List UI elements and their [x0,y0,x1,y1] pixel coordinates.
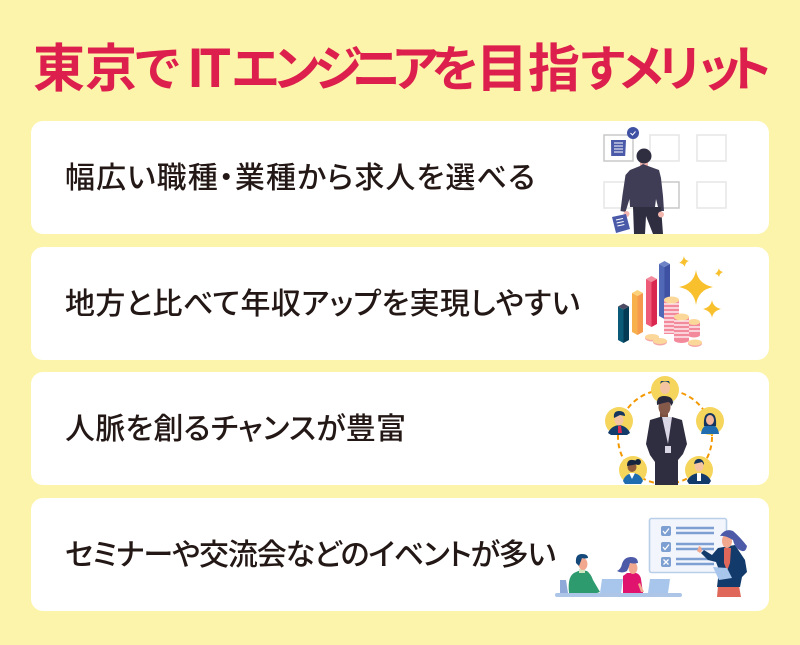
person: left [605,407,633,435]
presenter [697,530,747,597]
laptops [600,579,670,593]
text: panel 1: 幅広い職種・業種から求人を選べる [65,153,535,197]
person: top [651,376,679,404]
icon: rising bars, coins and sparkles [618,256,723,347]
icon: business network around a man [605,376,724,485]
panel: セミナーや交流会などのイベントが多い [31,498,769,611]
text: panel 4: セミナーや交流会などのイベントが多い [65,530,556,574]
person: lower right [685,456,713,484]
text: panel 3: 人脈を創るチャンスが豊富 [65,404,406,448]
man in suit [646,396,687,485]
panel: 幅広い職種・業種から求人を選べる [31,121,769,234]
person: right [696,407,724,435]
icon: man choosing job listings [604,127,726,234]
sparkles [679,256,723,318]
title: で [133,30,182,101]
checklist board [650,518,726,572]
panel: 地方と比べて年収アップを実現しやすい [31,247,769,360]
person: lower left [619,456,647,484]
table [555,593,682,597]
title: 目指 [476,27,580,102]
panel: 人脈を創るチャンスが豊富 [31,372,769,485]
coins [645,296,702,347]
title: すメリット [578,30,774,101]
text: panel 2: 地方と比べて年収アップを実現しやすい [65,279,580,323]
attendee: woman in pink [617,557,644,593]
attendee: man in green [560,554,600,593]
title: エンジニアを [231,30,480,101]
icon: seminar with presenter and attendees [555,518,747,597]
title: 東京 [33,27,137,102]
title: IT [187,27,232,102]
